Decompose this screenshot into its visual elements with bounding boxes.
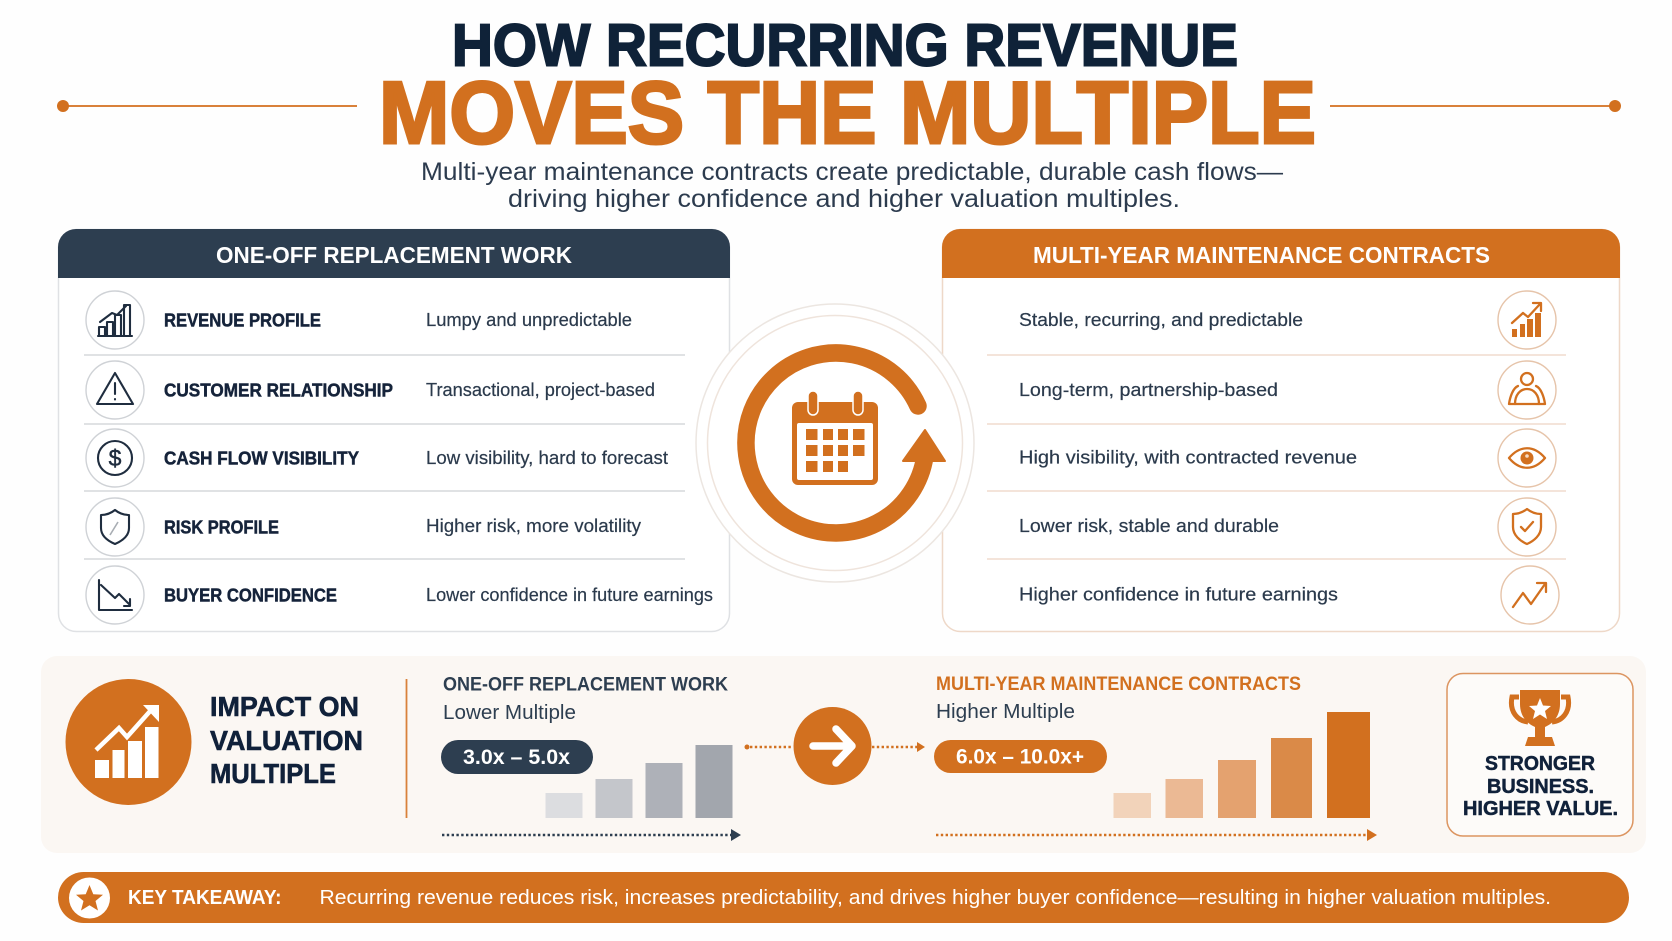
icon: calendar — [792, 391, 878, 485]
row: cash flow visibility — [164, 448, 668, 468]
callout: stronger business: STRONGER — [1485, 753, 1596, 775]
row: buyer confidence — [164, 584, 713, 606]
arrow: connector — [744, 707, 925, 785]
heading: impact on valuation multiple: MULTIPLE — [210, 758, 336, 789]
icon: trend up — [1501, 566, 1559, 624]
icon: revenue chart — [86, 291, 144, 349]
row: lower risk: Lower risk, stable and durable — [1019, 516, 1279, 536]
panel: multi-year maintenance contracts — [942, 229, 1620, 632]
multi-year multiple: Higher Multiple — [936, 701, 1075, 723]
icon: dollar — [86, 429, 144, 487]
icon: star badge — [69, 878, 110, 918]
panel header: multi-year: MULTI-YEAR MAINTENANCE CONTRACTS — [1033, 242, 1490, 268]
key takeaway bar: KEY TAKEAWAY: — [128, 887, 282, 909]
icon: growth badge — [66, 679, 192, 805]
key takeaway bar: Recurring revenue reduces risk, increases predictability, and drives higher buyer confidence—resulting in higher valuation multiples. — [320, 887, 1551, 909]
callout: stronger business — [1447, 674, 1633, 836]
one-off multiple: ONE-OFF REPLACEMENT WORK — [443, 674, 728, 696]
heading: impact on valuation multiple: IMPACT ON — [210, 691, 359, 722]
subtitle — [421, 158, 1283, 213]
arrow: dotted orange — [936, 829, 1377, 841]
row: high visibility: High visibility, with contracted revenue — [1019, 448, 1357, 468]
row: customer relationship: Transactional, project-based — [426, 380, 655, 400]
row: long-term: Long-term, partnership-based — [1019, 380, 1278, 400]
panel: impact on valuation multiple — [41, 656, 1646, 853]
bars: lower multiple — [546, 745, 732, 818]
heading: impact on valuation multiple — [210, 691, 363, 789]
row: risk profile: RISK PROFILE — [164, 516, 279, 538]
row: customer relationship — [164, 380, 655, 400]
multi-year multiple: MULTI-YEAR MAINTENANCE CONTRACTS — [936, 673, 1301, 695]
panel header: one-off: ONE-OFF REPLACEMENT WORK — [216, 242, 572, 268]
icon: dollar: $ — [109, 445, 122, 471]
panel header: one-off — [58, 229, 730, 278]
icon: shield check — [1498, 498, 1556, 556]
title — [379, 12, 1316, 162]
title: HOW RECURRING REVENUE — [452, 12, 1238, 78]
subtitle: driving higher confidence and higher valuation multiples. — [508, 185, 1180, 213]
row: cash flow visibility: Low visibility, hard to forecast — [426, 448, 668, 468]
title rule left — [57, 100, 357, 112]
row: customer relationship: CUSTOMER RELATIONSHIP — [164, 380, 393, 400]
icon: declining chart — [86, 566, 144, 624]
row: risk profile — [164, 516, 641, 538]
callout: stronger business: BUSINESS. — [1487, 776, 1594, 798]
icon: people — [1498, 361, 1556, 419]
title rule right — [1330, 100, 1621, 112]
icon: eye — [1498, 429, 1556, 487]
row: buyer confidence: Lower confidence in future earnings — [426, 585, 713, 605]
title: MOVES THE MULTIPLE — [379, 63, 1316, 162]
row: higher confidence: Higher confidence in future earnings — [1019, 584, 1338, 604]
row: revenue profile: REVENUE PROFILE — [164, 310, 321, 330]
panel header: multi-year — [942, 229, 1620, 278]
row: cash flow visibility: CASH FLOW VISIBILITY — [164, 448, 360, 468]
arrow: dotted navy — [442, 829, 741, 841]
icon: trophy — [1511, 690, 1569, 746]
icon: rising bars — [1498, 291, 1556, 349]
row: buyer confidence: BUYER CONFIDENCE — [164, 584, 337, 606]
one-off multiple: Lower Multiple — [443, 702, 576, 724]
center hub: recurring calendar — [696, 304, 974, 582]
row: revenue profile: Lumpy and unpredictable — [426, 310, 632, 330]
callout: stronger business: HIGHER VALUE. — [1463, 798, 1618, 820]
panel: one-off replacement work — [58, 229, 730, 632]
subtitle: Multi-year maintenance contracts create predictable, durable cash flows— — [421, 158, 1283, 186]
one-off multiple — [441, 674, 741, 841]
icon: warning triangle — [86, 361, 144, 419]
pill: 6.0x – 10.0x+ — [934, 740, 1107, 773]
icon: cycle arrow — [746, 353, 945, 533]
pill: 3.0x – 5.0x — [441, 740, 593, 774]
bars: higher multiple — [1114, 712, 1370, 818]
multi-year multiple — [934, 673, 1377, 841]
key takeaway bar — [58, 872, 1629, 923]
row: revenue profile — [164, 310, 632, 330]
pill: 3.0x – 5.0x: 3.0x – 5.0x — [463, 746, 570, 769]
icon: shield — [86, 498, 144, 556]
pill: 6.0x – 10.0x+: 6.0x – 10.0x+ — [956, 746, 1084, 768]
row: risk profile: Higher risk, more volatility — [426, 516, 641, 536]
row: stable recurring: Stable, recurring, and predictable — [1019, 310, 1303, 330]
heading: impact on valuation multiple: VALUATION — [210, 725, 363, 756]
